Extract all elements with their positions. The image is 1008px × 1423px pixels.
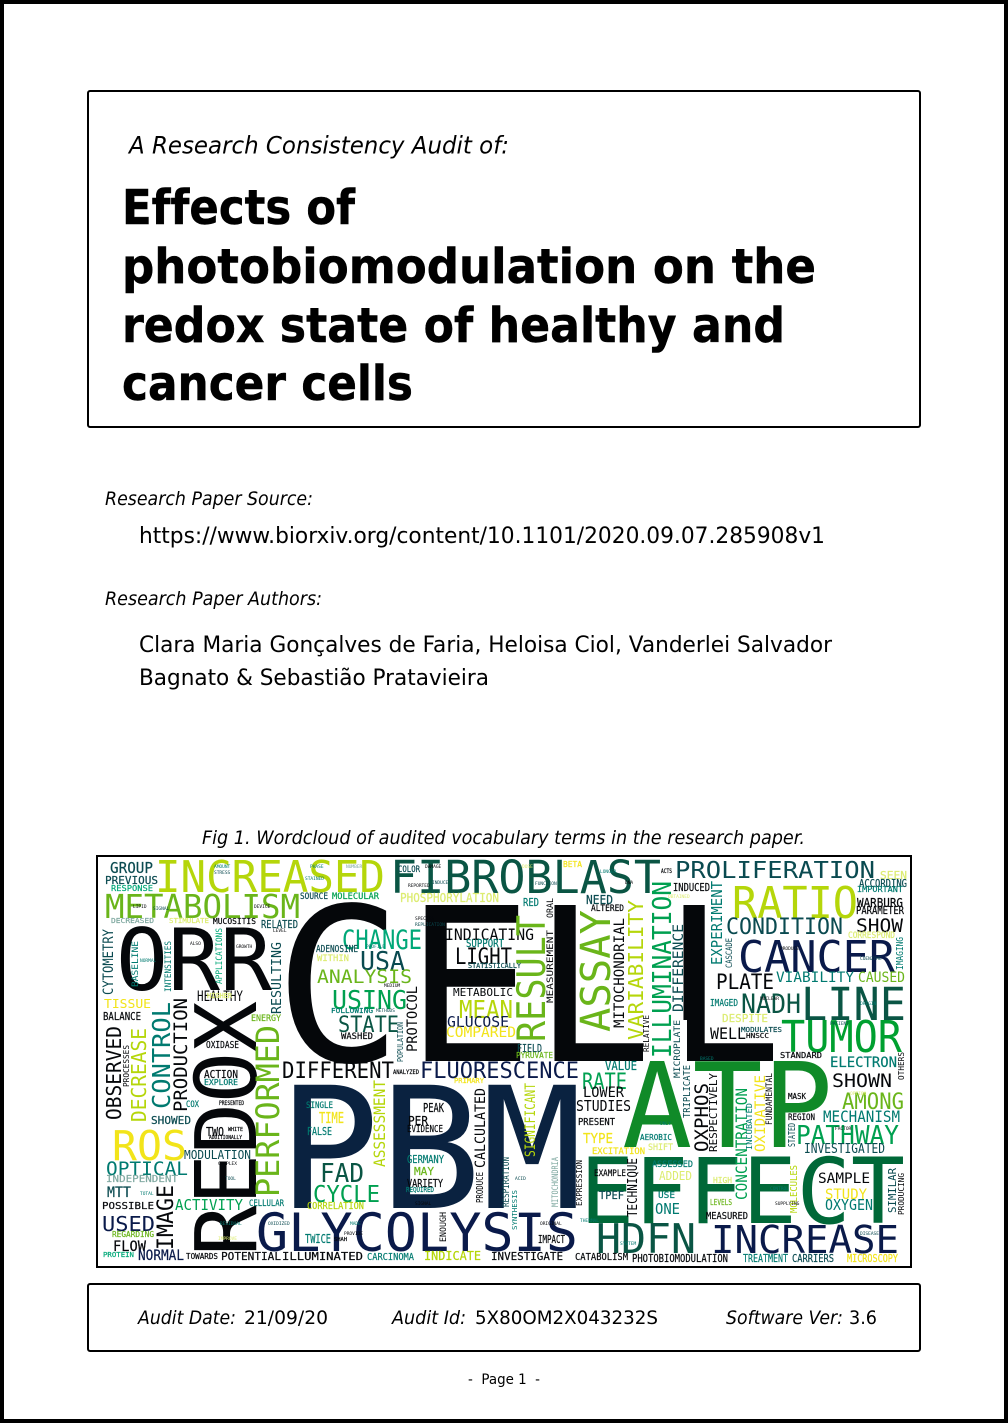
small horizontal terms: CORRESPOND: [848, 931, 895, 941]
small horizontal terms: ADDITIONALLY: [209, 1135, 242, 1141]
medium horizontal terms: MECHANISM: [823, 1107, 900, 1126]
tiny filler terms: PRODUCE: [780, 946, 799, 952]
main title: cancer cells: [122, 356, 413, 412]
largest terms: CELL: [274, 863, 790, 1112]
small horizontal terms: DESPITE: [722, 1012, 768, 1025]
vertical terms: PRODUCTION: [170, 998, 192, 1112]
tiny filler terms: OPTION: [850, 1091, 867, 1097]
medium horizontal terms: PATHWAY: [796, 1121, 899, 1151]
main title: [122, 180, 816, 412]
medium horizontal terms: COMPARED: [446, 1025, 516, 1041]
vertical terms: PROTOCOL: [405, 986, 421, 1052]
small horizontal terms: PRESENT: [578, 1117, 615, 1128]
small horizontal terms: CORRELATION: [307, 1201, 364, 1212]
small horizontal terms: HIGH: [713, 1176, 732, 1185]
small horizontal terms: INDEPENDENT: [106, 1174, 178, 1185]
small horizontal terms: PROTEIN: [103, 1251, 134, 1259]
vertical terms: RELATIVE: [642, 1015, 651, 1052]
vertical terms: PERFORMED: [249, 1025, 287, 1197]
vertical terms: ASSAY: [572, 910, 620, 1032]
tiny filler terms: FUNCTION: [535, 881, 557, 887]
tiny filler terms: TOTAL: [140, 1191, 154, 1197]
medium horizontal terms: CANCER: [738, 932, 895, 983]
small horizontal terms: WITHIN: [317, 954, 349, 964]
vertical terms: OBSERVED: [102, 1026, 126, 1120]
vertical terms: IMAGING: [895, 937, 906, 970]
vertical terms: DIFFERENCE: [671, 924, 687, 1012]
panel: audit details: [88, 1284, 920, 1351]
small horizontal terms: TWICE: [305, 1232, 331, 1246]
small horizontal terms: INDUCED: [673, 881, 710, 894]
tiny filler terms: MADE: [350, 1221, 361, 1227]
tiny filler terms: STAINED: [305, 876, 324, 882]
tiny filler terms: ORIGINAL: [540, 1221, 562, 1227]
small horizontal terms: FIELD: [517, 1042, 542, 1055]
medium horizontal terms: WELL: [710, 1024, 746, 1043]
source url: https://www.biorxiv.org/content/10.1101/2020.09.07.285908v1: [139, 523, 825, 549]
small horizontal terms: SHAH: [334, 1237, 347, 1243]
vertical terms: RESULTING: [270, 942, 285, 1014]
largest terms: [116, 863, 905, 1256]
small horizontal terms: ELECTRON: [830, 1055, 897, 1071]
medium horizontal terms: LIGHT: [455, 945, 512, 970]
small horizontal terms: ANALYZED: [393, 1069, 419, 1076]
medium horizontal terms: SAMPLE: [818, 1171, 870, 1187]
small horizontal terms: VARIETY: [407, 1177, 443, 1190]
medium horizontal terms: AMONG: [842, 1090, 904, 1115]
tiny filler terms: DOSE: [522, 864, 533, 870]
small horizontal terms: STIMULATE: [169, 917, 209, 925]
medium horizontal terms: INCREASED: [155, 852, 385, 903]
small horizontal terms: PHOSPHORYLATION: [400, 891, 499, 905]
medium horizontal terms: FAD: [320, 1159, 364, 1189]
tiny filler terms: METHODS: [376, 1008, 395, 1014]
tiny filler terms: [133, 864, 882, 1252]
small horizontal terms: POSSIBLE: [102, 1201, 154, 1212]
tiny filler terms: PROFILE: [366, 944, 385, 950]
small horizontal terms: MUCOSITIS: [213, 917, 256, 926]
small horizontal terms: PER: [408, 1114, 429, 1128]
small horizontal terms: IMAGED: [710, 998, 738, 1009]
vertical terms: INTENSITIES: [164, 941, 174, 992]
vertical terms: EXPERIMENT: [708, 881, 726, 965]
vertical terms: APPLICATIONS: [215, 928, 225, 984]
small horizontal terms: INDICATE: [424, 1249, 481, 1263]
medium horizontal terms: USING: [332, 986, 407, 1016]
small horizontal terms: RESPONSE: [111, 884, 153, 893]
tiny filler terms: ACID: [515, 1176, 526, 1182]
medium horizontal terms: ACTIVITY: [175, 1196, 243, 1214]
medium horizontal terms: ROS: [112, 1122, 187, 1170]
largest terms: PBM: [278, 1051, 583, 1248]
small horizontal terms: TOWARDS: [186, 1252, 218, 1261]
vertical terms: TECHNIQUE: [626, 1158, 641, 1217]
small horizontal terms: DECREASED: [111, 917, 154, 925]
small horizontal terms: MAY: [414, 1165, 434, 1178]
tiny filler terms: DEVICE: [254, 904, 271, 910]
small horizontal terms: WASHED: [341, 1032, 373, 1042]
small horizontal terms: MEASURED: [706, 1211, 748, 1222]
tiny filler terms: SPECIES: [415, 916, 434, 922]
vertical terms: CONCENTRATION: [732, 1088, 751, 1200]
medium horizontal terms: CONDITION: [726, 915, 843, 940]
small horizontal terms: MTT: [107, 1185, 132, 1201]
vertical terms: DECREASE: [127, 1028, 151, 1122]
medium horizontal terms: INVESTIGATED: [804, 1142, 885, 1157]
tiny filler terms: MEDIUM: [384, 983, 401, 989]
small horizontal terms: HIGHER: [207, 992, 233, 1000]
medium horizontal terms: TISSUE: [104, 997, 151, 1011]
panel: title box: [88, 91, 920, 427]
vertical terms: POPULATION: [396, 1022, 405, 1062]
software version: Software Ver:: [726, 1307, 843, 1329]
medium horizontal terms: ADDED: [659, 1169, 692, 1183]
vertical terms: TRIPLICATE: [682, 1065, 693, 1118]
tiny filler terms: TOOL: [225, 1176, 236, 1182]
small horizontal terms: PEAK: [423, 1101, 445, 1115]
small horizontal terms: EXPLORE: [204, 1078, 238, 1087]
small horizontal terms: CARRIERS: [792, 1252, 834, 1265]
figure caption: Fig 1. Wordcloud of audited vocabulary terms in the research paper.: [202, 827, 805, 849]
medium horizontal terms: [102, 851, 906, 1264]
software version: 3.6: [849, 1307, 877, 1329]
tiny filler terms: CONTROL: [770, 1186, 789, 1192]
tiny filler terms: DAMAGE: [425, 864, 442, 870]
tiny filler terms: LIPID: [133, 904, 147, 910]
medium horizontal terms: ANALYSIS: [317, 966, 412, 988]
small horizontal terms: TWO: [206, 1125, 224, 1139]
small horizontal terms: USE: [658, 1191, 675, 1201]
vertical terms: [101, 881, 906, 1250]
tiny filler terms: ALSO: [190, 941, 201, 947]
small horizontal terms: PRIMARY: [454, 1077, 485, 1085]
small horizontal terms: SEEN: [880, 869, 907, 882]
main title: redox state of healthy and: [122, 298, 785, 354]
tiny filler terms: SIGNAL: [415, 1201, 432, 1207]
small horizontal terms: ACTS: [661, 868, 672, 875]
vertical terms: ENOUGH: [439, 1212, 449, 1242]
small horizontal terms: PYRUVATE: [516, 1051, 553, 1060]
tiny filler terms: PROVIDE: [344, 1231, 363, 1237]
small horizontal terms: OXIDASE: [206, 1040, 239, 1051]
authors list: [139, 632, 833, 691]
largest terms: ATP: [622, 1037, 833, 1175]
medium horizontal terms: CYCLE: [313, 1182, 380, 1208]
audit date: Audit Date:: [136, 1307, 236, 1329]
small horizontal terms: HNSCC: [746, 1032, 769, 1040]
medium horizontal terms: GLYCOLYSIS: [256, 1203, 578, 1264]
medium horizontal terms: GLUCOSE: [447, 1013, 509, 1031]
medium horizontal terms: STUDIES: [576, 1097, 631, 1115]
main title: Effects of: [122, 180, 356, 236]
medium horizontal terms: HEALTHY: [197, 989, 243, 1005]
tiny filler terms: AMOUNT: [214, 864, 231, 870]
authors list: Bagnato & Sebastião Pratavieira: [139, 665, 489, 691]
medium horizontal terms: STATE: [338, 1013, 399, 1038]
tiny filler terms: SUPPLYING: [775, 1201, 800, 1207]
small horizontal terms: RELATED: [261, 918, 298, 931]
small horizontal terms: ADENOSINE: [316, 944, 358, 955]
source label: Research Paper Source:: [105, 488, 313, 510]
small horizontal terms: TIME: [319, 1109, 344, 1127]
small horizontal terms: CATABOLISM: [575, 1252, 628, 1263]
vertical terms: SIGNIFICANT: [523, 1083, 539, 1157]
small horizontal terms: REGION: [788, 1113, 815, 1123]
vertical terms: CONTROL: [147, 1002, 176, 1109]
small horizontal terms: SHOWED: [151, 1114, 191, 1127]
tiny filler terms: DNA: [625, 880, 633, 886]
small horizontal terms: IMPACT: [538, 1233, 565, 1246]
medium horizontal terms: INCREASE: [711, 1218, 899, 1262]
vertical terms: RESPIRATION: [502, 1157, 512, 1207]
medium horizontal terms: SHOWN: [832, 1070, 892, 1092]
small horizontal terms: MASK: [788, 1092, 806, 1101]
vertical terms: RESPECTIVELY: [707, 1073, 720, 1152]
small horizontal terms: TREATMENT: [743, 1252, 788, 1265]
small horizontal terms: TPEF: [599, 1189, 624, 1202]
tiny filler terms: PATIENT: [830, 1021, 849, 1027]
medium horizontal terms: USED: [102, 1212, 155, 1236]
medium horizontal terms: STUDY: [825, 1187, 868, 1203]
medium horizontal terms: RATIO: [732, 878, 858, 929]
tiny filler terms: ORIGIN: [860, 1001, 877, 1007]
vertical terms: MICROPLATE: [673, 1020, 683, 1078]
tiny filler terms: COENZYME: [860, 956, 882, 962]
medium horizontal terms: RATE: [582, 1070, 627, 1095]
chart: wordcloud: [97, 851, 911, 1267]
audit id: 5X80OM2X043232S: [475, 1307, 658, 1329]
vertical terms: CASCADE: [725, 938, 735, 968]
tiny filler terms: GROWTH: [236, 944, 253, 950]
page number: - Page 1 -: [468, 1372, 540, 1388]
vertical terms: ASSESSMENT: [370, 1080, 389, 1167]
small horizontal terms: PRESENTED: [219, 1100, 244, 1107]
vertical terms: MOLECULES: [789, 1165, 800, 1213]
small horizontal terms: COX: [186, 1100, 199, 1110]
medium horizontal terms: OPTICAL: [106, 1158, 188, 1180]
small horizontal terms: SUPPORT: [466, 937, 504, 950]
vertical terms: PROCESSES: [122, 1045, 131, 1087]
vertical terms: OTHERS: [897, 1052, 906, 1080]
small horizontal terms: GROUP: [110, 859, 153, 877]
medium horizontal terms: INDICATING: [445, 925, 534, 944]
medium horizontal terms: PROLIFERATION: [675, 858, 875, 884]
vertical terms: ILLUMINATION: [648, 881, 678, 1058]
small horizontal terms: BETA: [563, 860, 582, 869]
medium horizontal terms: FLUORESCENCE: [420, 1059, 579, 1084]
tiny filler terms: REPORTED: [408, 883, 430, 889]
vertical terms: STATED: [787, 1123, 798, 1147]
tiny filler terms: THERMAL: [580, 1218, 599, 1224]
vertical terms: MITOCHONDRIAL: [612, 918, 628, 1028]
tiny filler terms: IMPROVE: [218, 1236, 237, 1242]
audit subtitle: A Research Consistency Audit of:: [127, 132, 509, 160]
vertical terms: PRODUCING: [897, 1173, 906, 1215]
small horizontal terms: FALSE: [307, 1125, 332, 1138]
small horizontal terms: RED: [523, 896, 539, 909]
tiny filler terms: PHASE: [310, 864, 324, 870]
medium horizontal terms: USA: [360, 947, 405, 977]
vertical terms: CYTOMETRY: [101, 929, 117, 995]
medium horizontal terms: SHOW: [856, 915, 904, 937]
medium horizontal terms: LINE: [801, 978, 906, 1031]
tiny filler terms: INDUCE: [432, 880, 449, 886]
small horizontal terms: POTENTIAL: [221, 1250, 281, 1263]
small horizontal terms: ACCORDING: [859, 877, 907, 890]
vertical terms: PRODUCE: [475, 1172, 486, 1203]
small horizontal terms: WARBURG: [857, 896, 903, 910]
vertical terms: MEASUREMENT: [546, 929, 556, 1003]
small horizontal terms: ASSESSED: [652, 1160, 693, 1170]
medium horizontal terms: CAUSED: [858, 970, 905, 986]
vertical terms: FUNDAMENTAL: [765, 1073, 775, 1125]
medium horizontal terms: PLATE: [716, 970, 774, 994]
tiny filler terms: LONGER: [600, 869, 617, 875]
small horizontal terms: PHOTOBIOMODULATION: [632, 1252, 728, 1265]
tiny filler terms: ONLY: [660, 1121, 671, 1127]
vertical terms: SIMILAR: [886, 1168, 899, 1213]
medium horizontal terms: OXYGEN: [825, 1196, 873, 1214]
main title: photobiomodulation on the: [122, 239, 816, 295]
vertical terms: MITOCHONDRIA: [551, 1157, 561, 1207]
small horizontal terms: INVESTIGATE: [491, 1250, 563, 1263]
vertical terms: OXPHOS: [691, 1083, 713, 1152]
tiny filler terms: SIGNAL: [153, 906, 170, 912]
small horizontal terms: FLOW: [113, 1239, 147, 1255]
medium horizontal terms: DIFFERENT: [282, 1059, 394, 1084]
medium horizontal terms: NADH: [741, 989, 801, 1020]
small horizontal terms: MOLECULAR: [332, 892, 380, 902]
vertical terms: IMAGE: [154, 1185, 179, 1250]
small horizontal terms: FOLLOWING: [331, 1007, 373, 1015]
audit date: [136, 1307, 328, 1329]
small horizontal terms: TYPE: [583, 1132, 613, 1147]
largest terms: REDOX: [178, 1001, 277, 1256]
vertical terms: VARIABILITY: [624, 900, 648, 1040]
small horizontal terms: SOURCE: [300, 892, 328, 902]
small horizontal terms: EXCITATION: [592, 1147, 645, 1157]
tiny filler terms: NUMBER: [346, 864, 363, 870]
small horizontal terms: PREVIOUS: [105, 874, 158, 887]
small horizontal terms: MICROSCOPY: [847, 1252, 898, 1265]
medium horizontal terms: TUMOR: [781, 1012, 902, 1063]
medium horizontal terms: ONE: [655, 1200, 680, 1218]
tiny filler terms: REPLICATION: [415, 922, 445, 928]
vertical terms: INCUBATED: [745, 1103, 754, 1150]
medium horizontal terms: METABOLIC: [453, 986, 513, 999]
tiny filler terms: OXIDIZED: [268, 1221, 290, 1227]
vertical terms: CALCULATED: [473, 1088, 489, 1168]
tiny filler terms: NUCLEAR: [760, 996, 779, 1002]
small horizontal terms: AEROBIC: [640, 1133, 672, 1142]
small horizontal terms: CELLULAR: [249, 1199, 284, 1209]
small horizontal terms: NEED: [586, 893, 613, 907]
small horizontal terms: ILLUMINATED: [282, 1250, 363, 1263]
small horizontal terms: COLOR: [398, 865, 420, 875]
small horizontal terms: EVIDENCE: [407, 1124, 443, 1135]
small horizontal terms: LEVELS: [710, 1198, 732, 1207]
medium horizontal terms: CHANGE: [342, 925, 422, 956]
small horizontal terms: ACTION: [204, 1068, 238, 1081]
small horizontal terms: NORMAL: [138, 1248, 184, 1264]
vertical terms: EXPRESSION: [575, 1160, 584, 1206]
tiny filler terms: OBTAINED: [668, 894, 690, 900]
authors label: Research Paper Authors:: [105, 588, 322, 610]
small horizontal terms: STANDARD: [780, 1051, 822, 1060]
small horizontal terms: SINGLE: [306, 1101, 333, 1111]
small horizontal terms: PARAMETER: [856, 904, 904, 917]
small horizontal terms: EXAMPLE: [594, 1169, 626, 1179]
vertical terms: RESULT: [510, 915, 555, 1042]
medium horizontal terms: MEAN: [459, 995, 513, 1024]
tiny filler terms: BASED: [700, 1056, 714, 1062]
largest terms: EFFECT: [580, 1140, 905, 1245]
medium horizontal terms: METABOLISM: [105, 887, 300, 926]
small horizontal terms: ALTERED: [591, 904, 624, 914]
medium horizontal terms: HDFN: [596, 1215, 696, 1263]
medium horizontal terms: LOWER: [583, 1085, 625, 1101]
tiny filler terms: NORMAL: [140, 958, 157, 964]
tiny filler terms: LEVEL: [273, 928, 287, 934]
tiny filler terms: SYSTEM: [620, 1241, 637, 1247]
audit id: Audit Id:: [390, 1307, 466, 1329]
small horizontal terms: REGARDING: [112, 1230, 154, 1239]
largest terms: ORR: [116, 911, 272, 1011]
vertical terms: BASELINE: [131, 941, 141, 987]
vertical terms: ORAL: [546, 898, 556, 918]
small horizontal terms: CARCINOMA: [367, 1252, 414, 1263]
authors list: Clara Maria Gonçalves de Faria, Heloisa Ciol, Vanderlei Salvador: [139, 632, 833, 658]
tiny filler terms: FACTOR: [835, 1126, 852, 1132]
small horizontal terms: [102, 859, 907, 1265]
small horizontal terms: MODULATES: [741, 1026, 782, 1034]
small horizontal terms: STATISTICALLY: [468, 962, 522, 970]
small horizontal terms: IMPORTANT: [857, 885, 903, 894]
tiny filler terms: ALTER: [235, 1246, 249, 1252]
vertical terms: OXIDATIVE: [753, 1075, 769, 1152]
tiny filler terms: DISEASE: [860, 1231, 879, 1237]
small horizontal terms: VALUE: [605, 1059, 637, 1073]
small horizontal terms: WHITE: [228, 1127, 243, 1133]
tiny filler terms: STRESS: [214, 870, 231, 876]
audit date: 21/09/20: [244, 1307, 328, 1329]
tiny filler terms: COMPLEX: [218, 1161, 237, 1167]
small horizontal terms: ENERGY: [251, 1014, 282, 1024]
medium horizontal terms: VIABILITY: [776, 970, 855, 986]
small horizontal terms: BALANCE: [103, 1010, 141, 1023]
small horizontal terms: GERMANY: [407, 1153, 444, 1166]
small horizontal terms: REQUIRED: [406, 1186, 434, 1194]
audit id: [390, 1307, 658, 1329]
tiny filler terms: RESIDUAL: [220, 1221, 242, 1227]
small horizontal terms: SHIFT: [648, 1143, 674, 1153]
medium horizontal terms: MODULATION: [184, 1148, 251, 1162]
medium horizontal terms: FIBROBLAST: [390, 851, 661, 904]
vertical terms: SYNTHESIS: [511, 1190, 519, 1230]
